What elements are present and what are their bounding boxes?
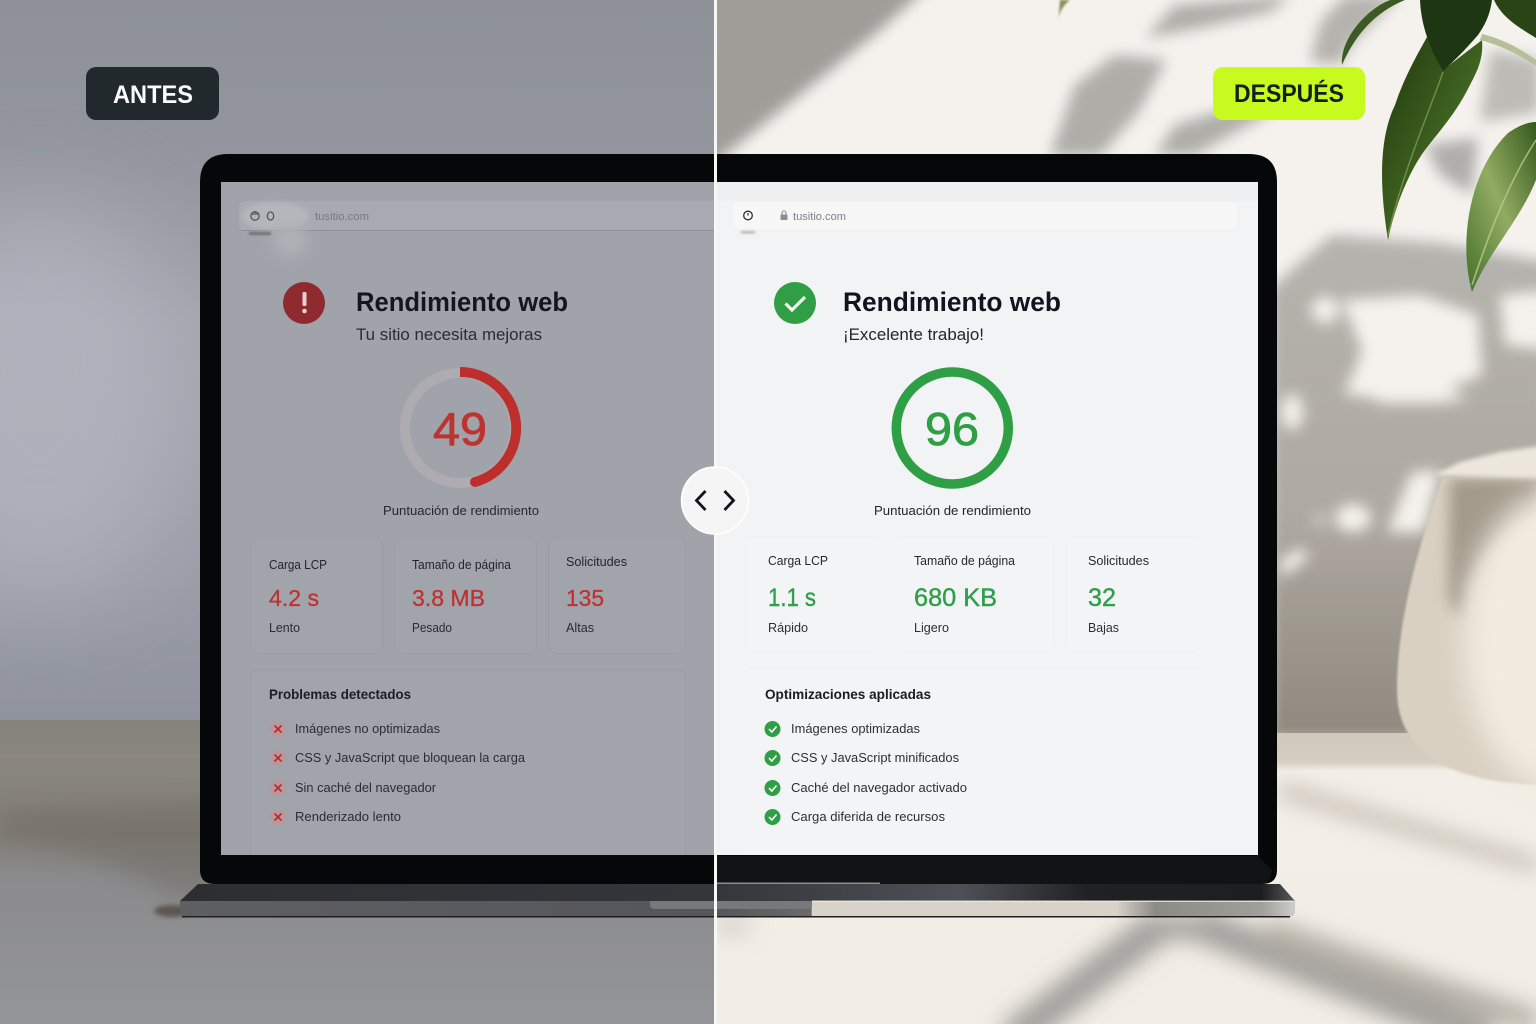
badge: después: DESPUÉS bbox=[1234, 79, 1344, 108]
laptop hinge notch bbox=[650, 901, 812, 909]
optimization item 3: Caché del navegador activado bbox=[791, 780, 967, 795]
laptop base bbox=[180, 884, 1295, 918]
score ring: 96 bbox=[896, 372, 1008, 484]
divider line bbox=[714, 0, 717, 1024]
laptop body bbox=[180, 154, 1295, 918]
background: after scene, sunlit wall with leaf shadows bbox=[700, 0, 1536, 740]
background: sunlit table with diagonal shadows bbox=[715, 733, 1536, 1024]
problem item 2: CSS y JavaScript que bloquean la carga bbox=[295, 750, 526, 765]
optimization item 4: Carga diferida de recursos bbox=[791, 809, 945, 824]
problem item 4: Renderizado lento bbox=[295, 809, 401, 824]
browser bar: after bbox=[732, 201, 1238, 234]
metric card: Carga LCP after: 1.1 s bbox=[768, 584, 816, 612]
arrow: right chevron bbox=[724, 491, 734, 510]
comparison slider handle bbox=[682, 467, 748, 534]
badge: después bbox=[1213, 67, 1365, 120]
browser bar: after: tusitio.com bbox=[793, 211, 846, 223]
metric card: Solicitudes after: Bajas bbox=[1088, 621, 1119, 635]
score ring: 49 bbox=[405, 372, 516, 487]
metric card: Tamaño de página before bbox=[394, 538, 536, 654]
icon: ceramic pot bbox=[1397, 446, 1536, 790]
metric card: Tamaño de página before: Pesado bbox=[412, 621, 452, 635]
metric card: Tamaño de página after: Ligero bbox=[914, 621, 949, 635]
problem item 3: Sin caché del navegador bbox=[295, 780, 437, 795]
metric card: Solicitudes after: Solicitudes bbox=[1088, 554, 1149, 568]
panel: problemas detectados bbox=[250, 670, 686, 855]
problem item 1: Imágenes no optimizadas bbox=[295, 721, 440, 736]
metric card: Carga LCP before bbox=[250, 538, 382, 654]
background: before scene, grey wall and table bbox=[0, 0, 716, 1024]
title: after: Rendimiento web bbox=[843, 287, 1061, 317]
optimization item 2: CSS y JavaScript minificados bbox=[791, 750, 959, 765]
metric card: Tamaño de página before: 3.8 MB bbox=[412, 585, 485, 611]
laptop lid bbox=[200, 154, 1277, 884]
icon: plant leaves bbox=[1058, 0, 1536, 292]
optimization item 1: Imágenes optimizadas bbox=[791, 721, 920, 736]
score label: after: Puntuación de rendimiento bbox=[874, 503, 1031, 518]
title: before: Rendimiento web bbox=[356, 287, 568, 317]
icon: green check bbox=[774, 282, 816, 324]
metric card: Solicitudes before bbox=[548, 538, 686, 654]
badge: antes bbox=[86, 67, 219, 120]
subtitle: before: Tu sitio necesita mejoras bbox=[356, 325, 542, 344]
score ring: 49: 49 bbox=[433, 403, 487, 455]
arrow: left chevron bbox=[696, 491, 706, 510]
metric card: Carga LCP before: 4.2 s bbox=[269, 585, 319, 611]
score ring: 96: 96 bbox=[925, 403, 979, 455]
badge: antes: ANTES bbox=[113, 81, 193, 109]
metric card: Carga LCP before: Lento bbox=[269, 621, 300, 635]
metric card: Carga LCP after: Rápido bbox=[768, 621, 808, 635]
screen: before bbox=[221, 182, 715, 855]
metric card: Carga LCP before: Carga LCP bbox=[269, 558, 327, 572]
icon: red warning bbox=[283, 282, 325, 324]
metric card: Solicitudes before: Solicitudes bbox=[566, 555, 627, 569]
metric card: Tamaño de página after: Tamaño de página bbox=[914, 554, 1015, 568]
subtitle: after: ¡Excelente trabajo! bbox=[843, 325, 984, 344]
panel: problemas detectados: Problemas detectados bbox=[269, 686, 411, 702]
panel: optimizaciones aplicadas: Optimizaciones aplicadas bbox=[765, 686, 931, 702]
screen: after bbox=[715, 182, 1258, 855]
metric card: Solicitudes after bbox=[1066, 538, 1202, 650]
browser bar: before: tusitio.com bbox=[315, 211, 369, 223]
metric card: Tamaño de página before: Tamaño de página bbox=[412, 558, 511, 572]
metric card: Carga LCP after: Carga LCP bbox=[768, 554, 828, 568]
metric card: Tamaño de página after bbox=[894, 538, 1054, 650]
panel: optimizaciones aplicadas bbox=[742, 670, 1202, 855]
metric card: Solicitudes after: 32 bbox=[1088, 584, 1116, 612]
metric card: Carga LCP after bbox=[746, 538, 882, 650]
metric card: Solicitudes before: Altas bbox=[566, 621, 594, 635]
score label: before: Puntuación de rendimiento bbox=[383, 503, 539, 518]
metric card: Tamaño de página after: 680 KB bbox=[914, 584, 997, 612]
browser bar: before bbox=[239, 201, 715, 256]
background: right wall shadow mass and bright patches bbox=[1270, 235, 1536, 740]
metric card: Solicitudes before: 135 bbox=[566, 585, 604, 611]
